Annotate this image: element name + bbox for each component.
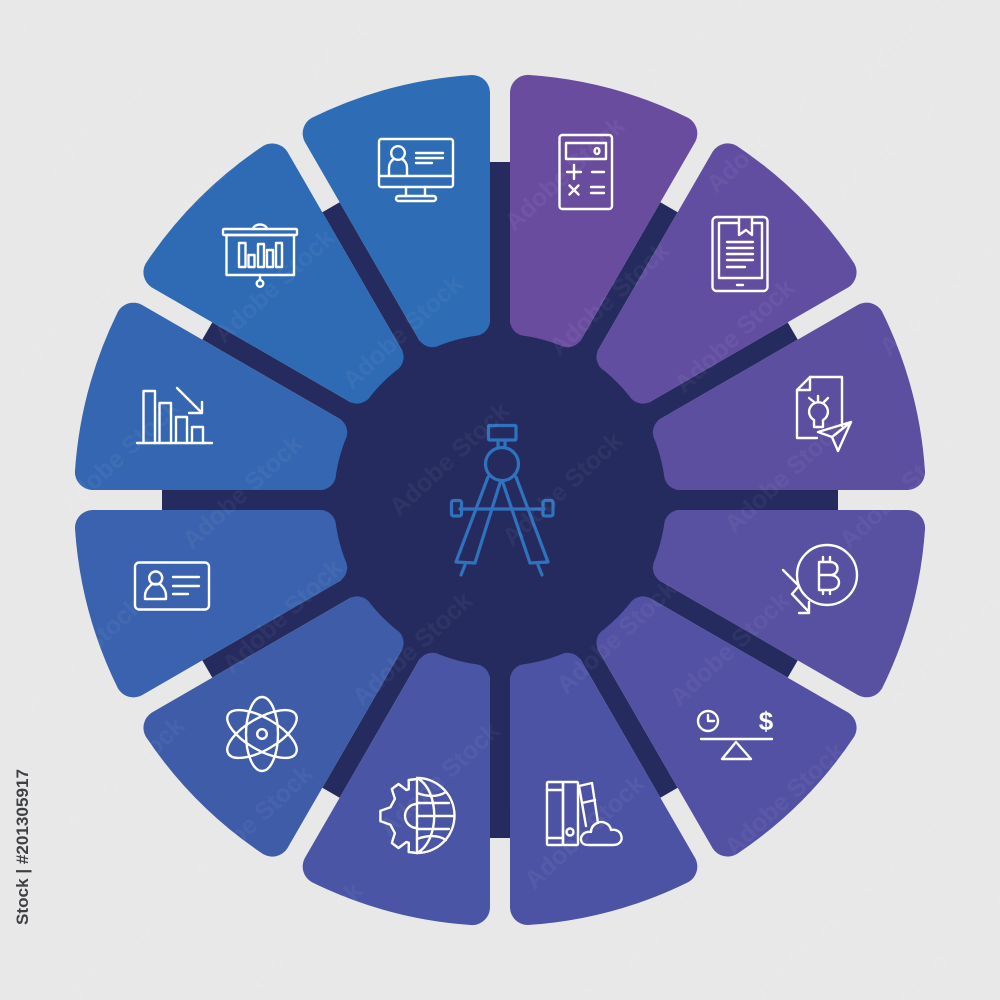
icon: bitcoin falling	[783, 545, 857, 613]
dark hub with spokes	[162, 162, 838, 838]
panel: segment declining chart	[75, 303, 347, 490]
panel: segment time is money	[534, 585, 863, 883]
watermark pattern: Adobe Stock	[669, 274, 800, 398]
icon: scale with clock and dollar	[698, 706, 774, 759]
stock image ID text: Stock | #201305917	[13, 769, 32, 925]
panel: segment cloud library	[406, 637, 704, 967]
panel: segment idea document	[637, 296, 967, 594]
watermark pattern: Adobe Stock	[337, 270, 468, 394]
panel: segment atom	[117, 534, 415, 863]
icon: gear and globe	[380, 778, 454, 853]
watermark pattern: Adobe Stock	[54, 394, 185, 518]
watermark pattern: Adobe Stock	[519, 770, 650, 894]
watermark pattern: Adobe Stock	[237, 877, 368, 1000]
watermark pattern: Adobe Stock	[17, 592, 148, 716]
icon: monitor with profile	[379, 139, 453, 201]
panel: segment ID card	[33, 406, 363, 704]
icon: books with cloud	[547, 782, 622, 845]
watermark pattern: Adobe Stock	[701, 74, 832, 198]
icon: presentation board	[223, 224, 297, 287]
icon: drawing compass	[452, 426, 553, 575]
icon: calculator	[560, 135, 612, 209]
watermark pattern: Adobe Stock	[384, 397, 515, 521]
watermark pattern: Adobe Stock	[497, 427, 628, 551]
watermark pattern: Adobe Stock	[499, 112, 630, 236]
panel: segment tablet	[585, 137, 883, 466]
watermark pattern: Adobe Stock	[217, 554, 348, 678]
icon: declining bar chart	[137, 388, 212, 443]
watermark pattern: Adobe Stock	[187, 760, 318, 884]
watermark pattern: Adobe Stock	[829, 82, 960, 206]
watermark pattern: Adobe Stock	[847, 782, 978, 906]
icon: scale with clock and dollar: $	[759, 706, 774, 736]
watermark pattern: Adobe Stock	[347, 587, 478, 711]
panel: segment presentation board	[137, 117, 466, 415]
watermark pattern: Adobe Stock	[719, 414, 850, 538]
watermark pattern: Adobe Stock	[544, 237, 675, 361]
watermark pattern: Adobe Stock	[209, 224, 340, 348]
watermark pattern: Adobe Stock	[551, 575, 682, 699]
icon: atom	[220, 697, 304, 771]
panel: segment bitcoin	[653, 510, 925, 697]
watermark pattern: Adobe Stock	[719, 737, 850, 861]
panel: segment calculator	[510, 75, 697, 347]
icon: e-book tablet	[712, 217, 768, 291]
watermark pattern: Adobe Stock	[374, 717, 505, 841]
watermark pattern: Adobe Stock	[59, 712, 190, 836]
panel: segment global settings	[303, 653, 490, 925]
watermark pattern: Adobe Stock	[834, 430, 965, 554]
watermark pattern: Adobe Stock	[7, 257, 138, 381]
watermark pattern: Adobe Stock	[664, 587, 795, 711]
panel: segment online profile	[296, 33, 594, 363]
icon: ID card	[135, 562, 209, 610]
watermark pattern: Adobe Stock	[167, 97, 298, 221]
watermark pattern: Adobe Stock	[177, 430, 308, 554]
icon: idea document with paper plane	[797, 377, 851, 451]
watermark pattern: Adobe Stock	[39, 57, 170, 181]
